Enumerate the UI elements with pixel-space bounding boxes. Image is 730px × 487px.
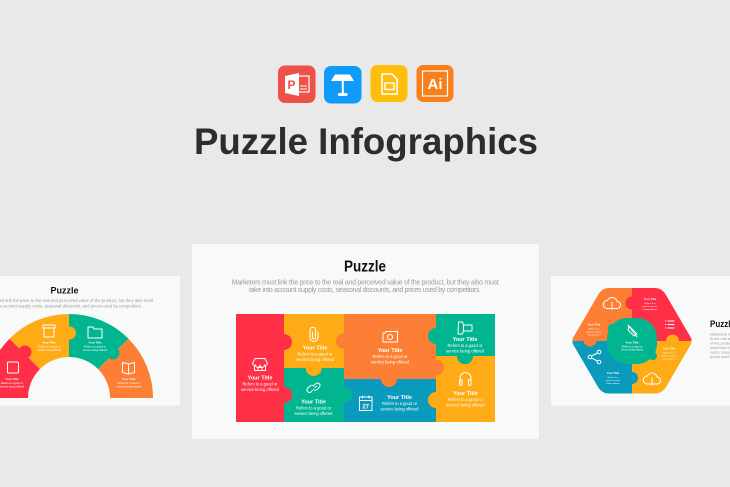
label: blue piece: Refers to a good or <box>382 401 418 406</box>
piece: yellow <box>626 334 692 394</box>
title: Puzzle Infographics <box>194 121 538 162</box>
label: centre piece: Your Title <box>625 340 639 344</box>
label: yellow piece: Refers to a <box>664 352 675 354</box>
label: red piece <box>643 297 658 311</box>
piece: yellow right <box>428 356 495 422</box>
label: green top piece <box>446 337 485 354</box>
icon: paperclip <box>310 327 318 342</box>
label: centre piece: Refers to a good or <box>622 346 642 348</box>
label: green top piece: Refers to a good or <box>447 343 483 348</box>
label: red piece: being offered <box>644 308 657 311</box>
piece: green <box>69 314 128 369</box>
label: blue piece <box>381 395 419 412</box>
label: orange piece: Refers to a <box>589 328 600 330</box>
text: calendar date: 27 <box>362 404 370 410</box>
heading: main slide: Puzzle <box>344 258 386 276</box>
label: blue piece: Your Title <box>387 395 412 401</box>
piece: blue <box>344 379 436 422</box>
icon: Illustrator: Ai <box>428 76 442 93</box>
label: blue piece: service being offered <box>381 406 419 412</box>
label: orange piece: service being offered <box>117 384 141 388</box>
piece: orange <box>572 288 632 341</box>
label: blue piece <box>606 371 621 385</box>
label: green top piece: Your Title <box>453 337 477 343</box>
label: red piece: Your Title <box>5 377 19 381</box>
icon: shop <box>252 358 268 370</box>
label: yellow piece <box>37 340 62 352</box>
piece: red <box>626 288 692 341</box>
label: orange piece: service being offered <box>371 360 410 364</box>
icon: share <box>588 350 601 364</box>
text block: main slide description: Marketers must link the price to the real and perceived value of the product, but they also must <box>232 280 499 286</box>
label: green lower piece <box>295 400 333 416</box>
label: red piece: service being offered <box>241 387 280 392</box>
label: orange piece: Your Title <box>378 348 402 354</box>
label: orange piece: being offered <box>588 334 601 336</box>
chart: rectangular puzzle <box>236 314 495 422</box>
chart: semicircle puzzle <box>0 314 153 398</box>
label: yellow piece: being offered <box>663 358 676 360</box>
icon: cloud upload <box>603 297 620 310</box>
label: orange piece: Refers to a good or <box>118 381 140 385</box>
label: orange piece <box>117 377 141 388</box>
chart: hexagon puzzle <box>572 288 692 394</box>
icon: cloud download <box>643 373 660 385</box>
label: yellow top piece <box>296 346 335 362</box>
label: orange piece <box>371 348 410 364</box>
label: red piece <box>241 376 280 392</box>
piece: green centre <box>607 318 657 364</box>
text block: main slide description: take into account supply costs, seasonal discounts, and prices used by competitors. <box>249 287 481 294</box>
label: blue piece: being offered <box>607 382 620 385</box>
label: orange piece <box>587 322 602 336</box>
icon: Keynote <box>324 66 362 104</box>
label: green piece: Refers to a good or <box>84 344 106 348</box>
label: green lower piece: service being offered <box>295 411 333 416</box>
label: blue piece: Your Title <box>607 371 620 375</box>
panel: left slide <box>0 276 180 406</box>
label: yellow top piece: Your Title <box>303 346 327 352</box>
piece: orange <box>336 314 444 387</box>
icon: PowerPoint: P <box>287 78 296 92</box>
app icons row <box>278 65 454 104</box>
text block: right slide description <box>710 332 730 359</box>
icon: Google Slides <box>370 65 408 102</box>
label: red piece: Your Title <box>248 376 272 382</box>
label: orange piece: Your Title <box>588 322 601 326</box>
label: centre piece <box>621 340 644 352</box>
label: blue piece: good or service <box>606 379 621 382</box>
icon: Illustrator <box>416 65 454 102</box>
icon: calendar <box>360 396 372 410</box>
icon: mug <box>8 362 18 373</box>
icon: list <box>666 321 674 328</box>
icon: camera <box>383 332 398 342</box>
label: red piece: Refers to a good or <box>1 381 23 385</box>
label: green piece: Your Title <box>88 340 102 344</box>
label: yellow piece: service being offered <box>37 348 62 352</box>
icon: muted speaker <box>628 325 637 337</box>
label: blue piece: Refers to a <box>608 376 619 379</box>
label: yellow right piece: service being offered <box>447 402 485 408</box>
label: red piece: service being offered <box>0 384 25 388</box>
text block: main slide description <box>232 280 499 294</box>
icon: book <box>122 362 134 374</box>
piece: red <box>0 339 40 398</box>
panel: right slide <box>551 276 730 406</box>
text block: left slide description <box>0 298 154 308</box>
label: orange piece: Refers to a good or <box>372 354 408 359</box>
label: yellow piece: Your Title <box>663 346 676 350</box>
label: yellow piece <box>662 346 677 360</box>
icon: link <box>307 383 320 392</box>
label: yellow piece: Refers to a good or <box>38 344 60 348</box>
label: red piece: Your Title <box>644 297 657 301</box>
label: red piece <box>0 377 25 388</box>
label: orange piece: Your Title <box>122 377 136 381</box>
icon: box <box>43 325 55 337</box>
piece: yellow top <box>284 314 344 368</box>
piece: blue <box>572 334 632 394</box>
icon: folder <box>88 327 102 338</box>
piece: green top <box>428 314 495 364</box>
label: red piece: good or service <box>643 305 658 308</box>
label: orange piece: good or service <box>587 330 602 334</box>
piece: orange <box>98 339 153 398</box>
label: yellow right piece: Refers to a good or <box>448 397 484 402</box>
label: yellow right piece <box>447 391 485 408</box>
label: yellow piece: good or service <box>662 354 677 358</box>
piece: green lower <box>284 368 344 422</box>
label: yellow top piece: service being offered <box>296 357 335 362</box>
label: green piece <box>83 340 108 352</box>
label: yellow right piece: Your Title <box>453 391 478 397</box>
label: green piece: service being offered <box>83 348 108 352</box>
label: yellow top piece: Refers to a good or <box>297 352 333 356</box>
icon: PowerPoint <box>278 66 316 103</box>
panel: main slide <box>192 244 539 439</box>
heading: left slide: Puzzle <box>50 286 78 296</box>
label: green top piece: service being offered <box>446 348 485 354</box>
piece: red <box>236 314 292 422</box>
label: green lower piece: Refers to a good or <box>296 406 332 410</box>
icon: headphones <box>460 372 471 386</box>
label: red piece: Refers to a <box>645 302 656 305</box>
label: red piece: Refers to a good or <box>242 382 278 386</box>
piece: yellow <box>10 314 69 369</box>
label: green lower piece: Your Title <box>301 400 326 406</box>
label: yellow piece: Your Title <box>42 340 56 344</box>
label: centre piece: service being offered <box>621 348 644 352</box>
icon: flashlight <box>458 322 472 334</box>
